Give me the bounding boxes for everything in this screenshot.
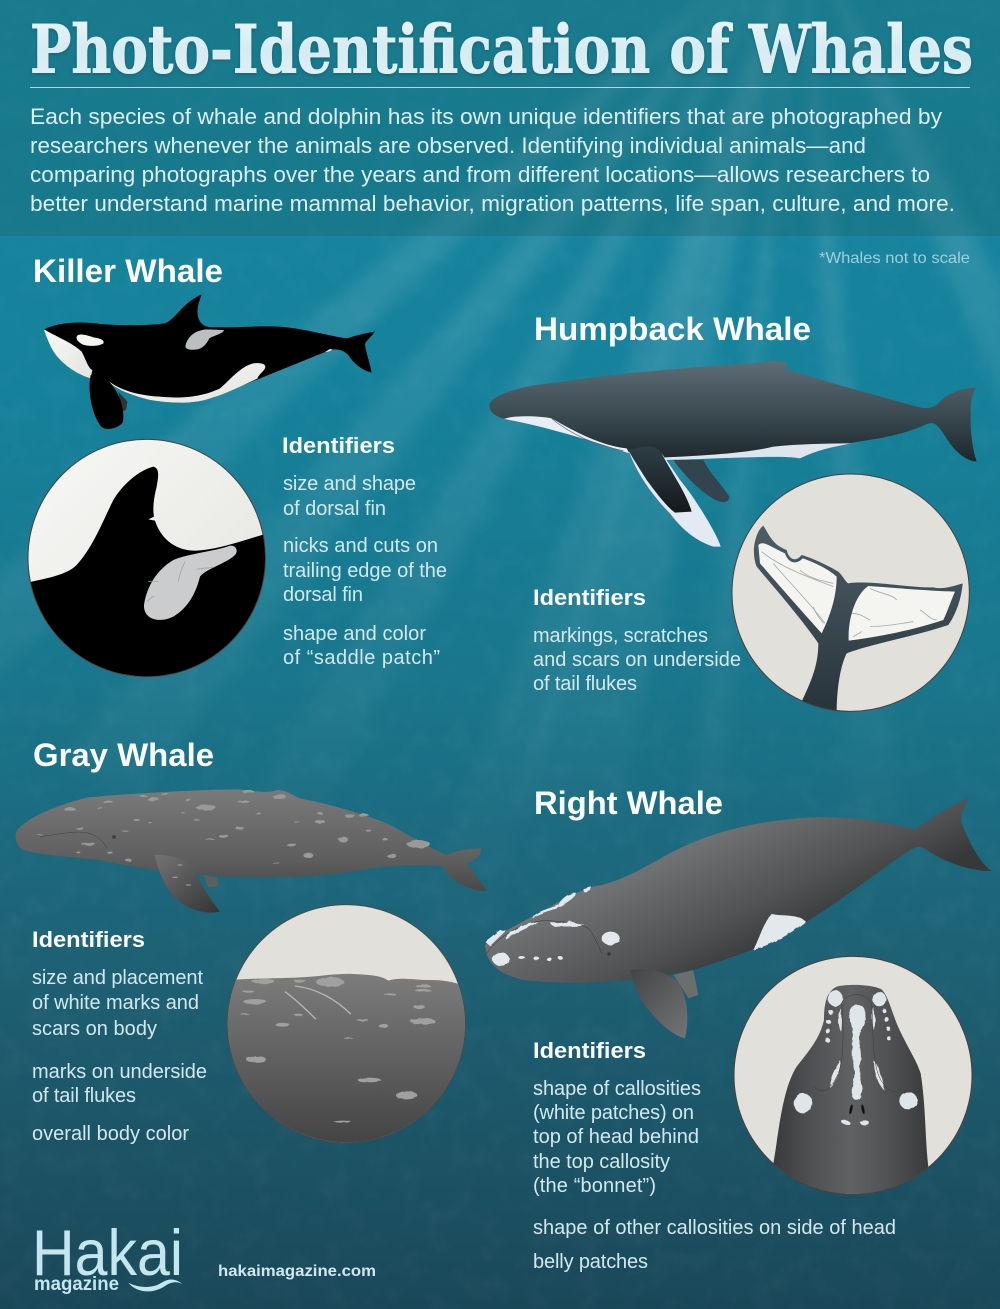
illustration: killer whale xyxy=(44,294,375,429)
identifiers: gray whale xyxy=(32,927,207,1145)
identifiers: right whale xyxy=(533,1038,896,1273)
identifiers: gray whale: size and placement xyxy=(32,967,203,989)
illustration: humpback whale xyxy=(489,361,977,547)
identifiers: humpback whale xyxy=(533,585,741,695)
logo: Hakai magazine: Hakai xyxy=(32,1216,183,1289)
intro paragraph: better understand marine mammal behavior, migration patterns, life span, culture, and more. xyxy=(30,191,955,216)
intro paragraph: Each species of whale and dolphin has its own unique identifiers that are photographed by xyxy=(30,104,942,129)
photo detail: body markings xyxy=(227,905,467,1147)
heading: gray whale: Gray Whale xyxy=(33,737,214,773)
identifiers: killer whale: Identifiers xyxy=(282,433,395,458)
identifiers: killer whale: of dorsal fin xyxy=(283,498,386,520)
identifiers: right whale: (the “bonnet”) xyxy=(533,1175,656,1197)
identifiers: killer whale: size and shape xyxy=(283,473,416,495)
identifiers: killer whale: shape and color xyxy=(283,623,426,645)
identifiers: gray whale: scars on body xyxy=(32,1018,157,1040)
identifiers: right whale: shape of other callosities on side of head xyxy=(533,1217,896,1239)
identifiers: killer whale xyxy=(282,433,447,669)
illustration: right whale xyxy=(485,798,992,1038)
panel: killer whale xyxy=(28,253,447,680)
intro paragraph xyxy=(30,104,955,216)
heading: right whale: Right Whale xyxy=(534,785,723,821)
intro paragraph: comparing photographs over the years and from different locations—allows researchers to xyxy=(30,162,930,187)
identifiers: humpback whale: and scars on underside xyxy=(533,649,741,671)
illustration: gray whale xyxy=(16,789,487,913)
intro paragraph: researchers whenever the animals are observed. Identifying individual animals—and xyxy=(30,133,866,158)
website url: hakaimagazine.com xyxy=(218,1263,376,1280)
identifiers: killer whale: trailing edge of the xyxy=(283,560,447,582)
identifiers: gray whale: overall body color xyxy=(32,1123,189,1145)
panel: right whale xyxy=(485,785,992,1273)
scale note: *Whales not to scale xyxy=(819,250,970,267)
identifiers: killer whale: nicks and cuts on xyxy=(283,535,438,557)
photo detail: dorsal fin and saddle patch xyxy=(28,439,267,680)
heading: killer whale: Killer Whale xyxy=(33,253,223,289)
panel: gray whale xyxy=(16,737,487,1147)
logo: Hakai magazine: magazine xyxy=(34,1274,119,1295)
identifiers: right whale: belly patches xyxy=(533,1251,648,1273)
identifiers: gray whale: of white marks and xyxy=(32,992,199,1014)
identifiers: gray whale: of tail flukes xyxy=(32,1085,136,1107)
identifiers: humpback whale: of tail flukes xyxy=(533,673,637,695)
photo detail: head callosities xyxy=(734,956,972,1223)
identifiers: gray whale: marks on underside xyxy=(32,1061,207,1083)
identifiers: right whale: the top callosity xyxy=(533,1151,670,1173)
identifiers: right whale: (white patches) on xyxy=(533,1102,694,1124)
identifiers: humpback whale: Identifiers xyxy=(533,585,646,610)
identifiers: killer whale: of “saddle patch” xyxy=(283,647,440,669)
identifiers: killer whale: dorsal fin xyxy=(283,584,363,606)
identifiers: humpback whale: markings, scratches xyxy=(533,625,708,647)
panel: humpback whale xyxy=(489,311,977,713)
identifiers: right whale: top of head behind xyxy=(533,1126,699,1148)
identifiers: right whale: shape of callosities xyxy=(533,1078,701,1100)
photo detail: tail flukes xyxy=(732,474,969,713)
identifiers: gray whale: Identifiers xyxy=(32,927,145,952)
identifiers: right whale: Identifiers xyxy=(533,1038,646,1063)
heading: humpback whale: Humpback Whale xyxy=(534,311,811,347)
